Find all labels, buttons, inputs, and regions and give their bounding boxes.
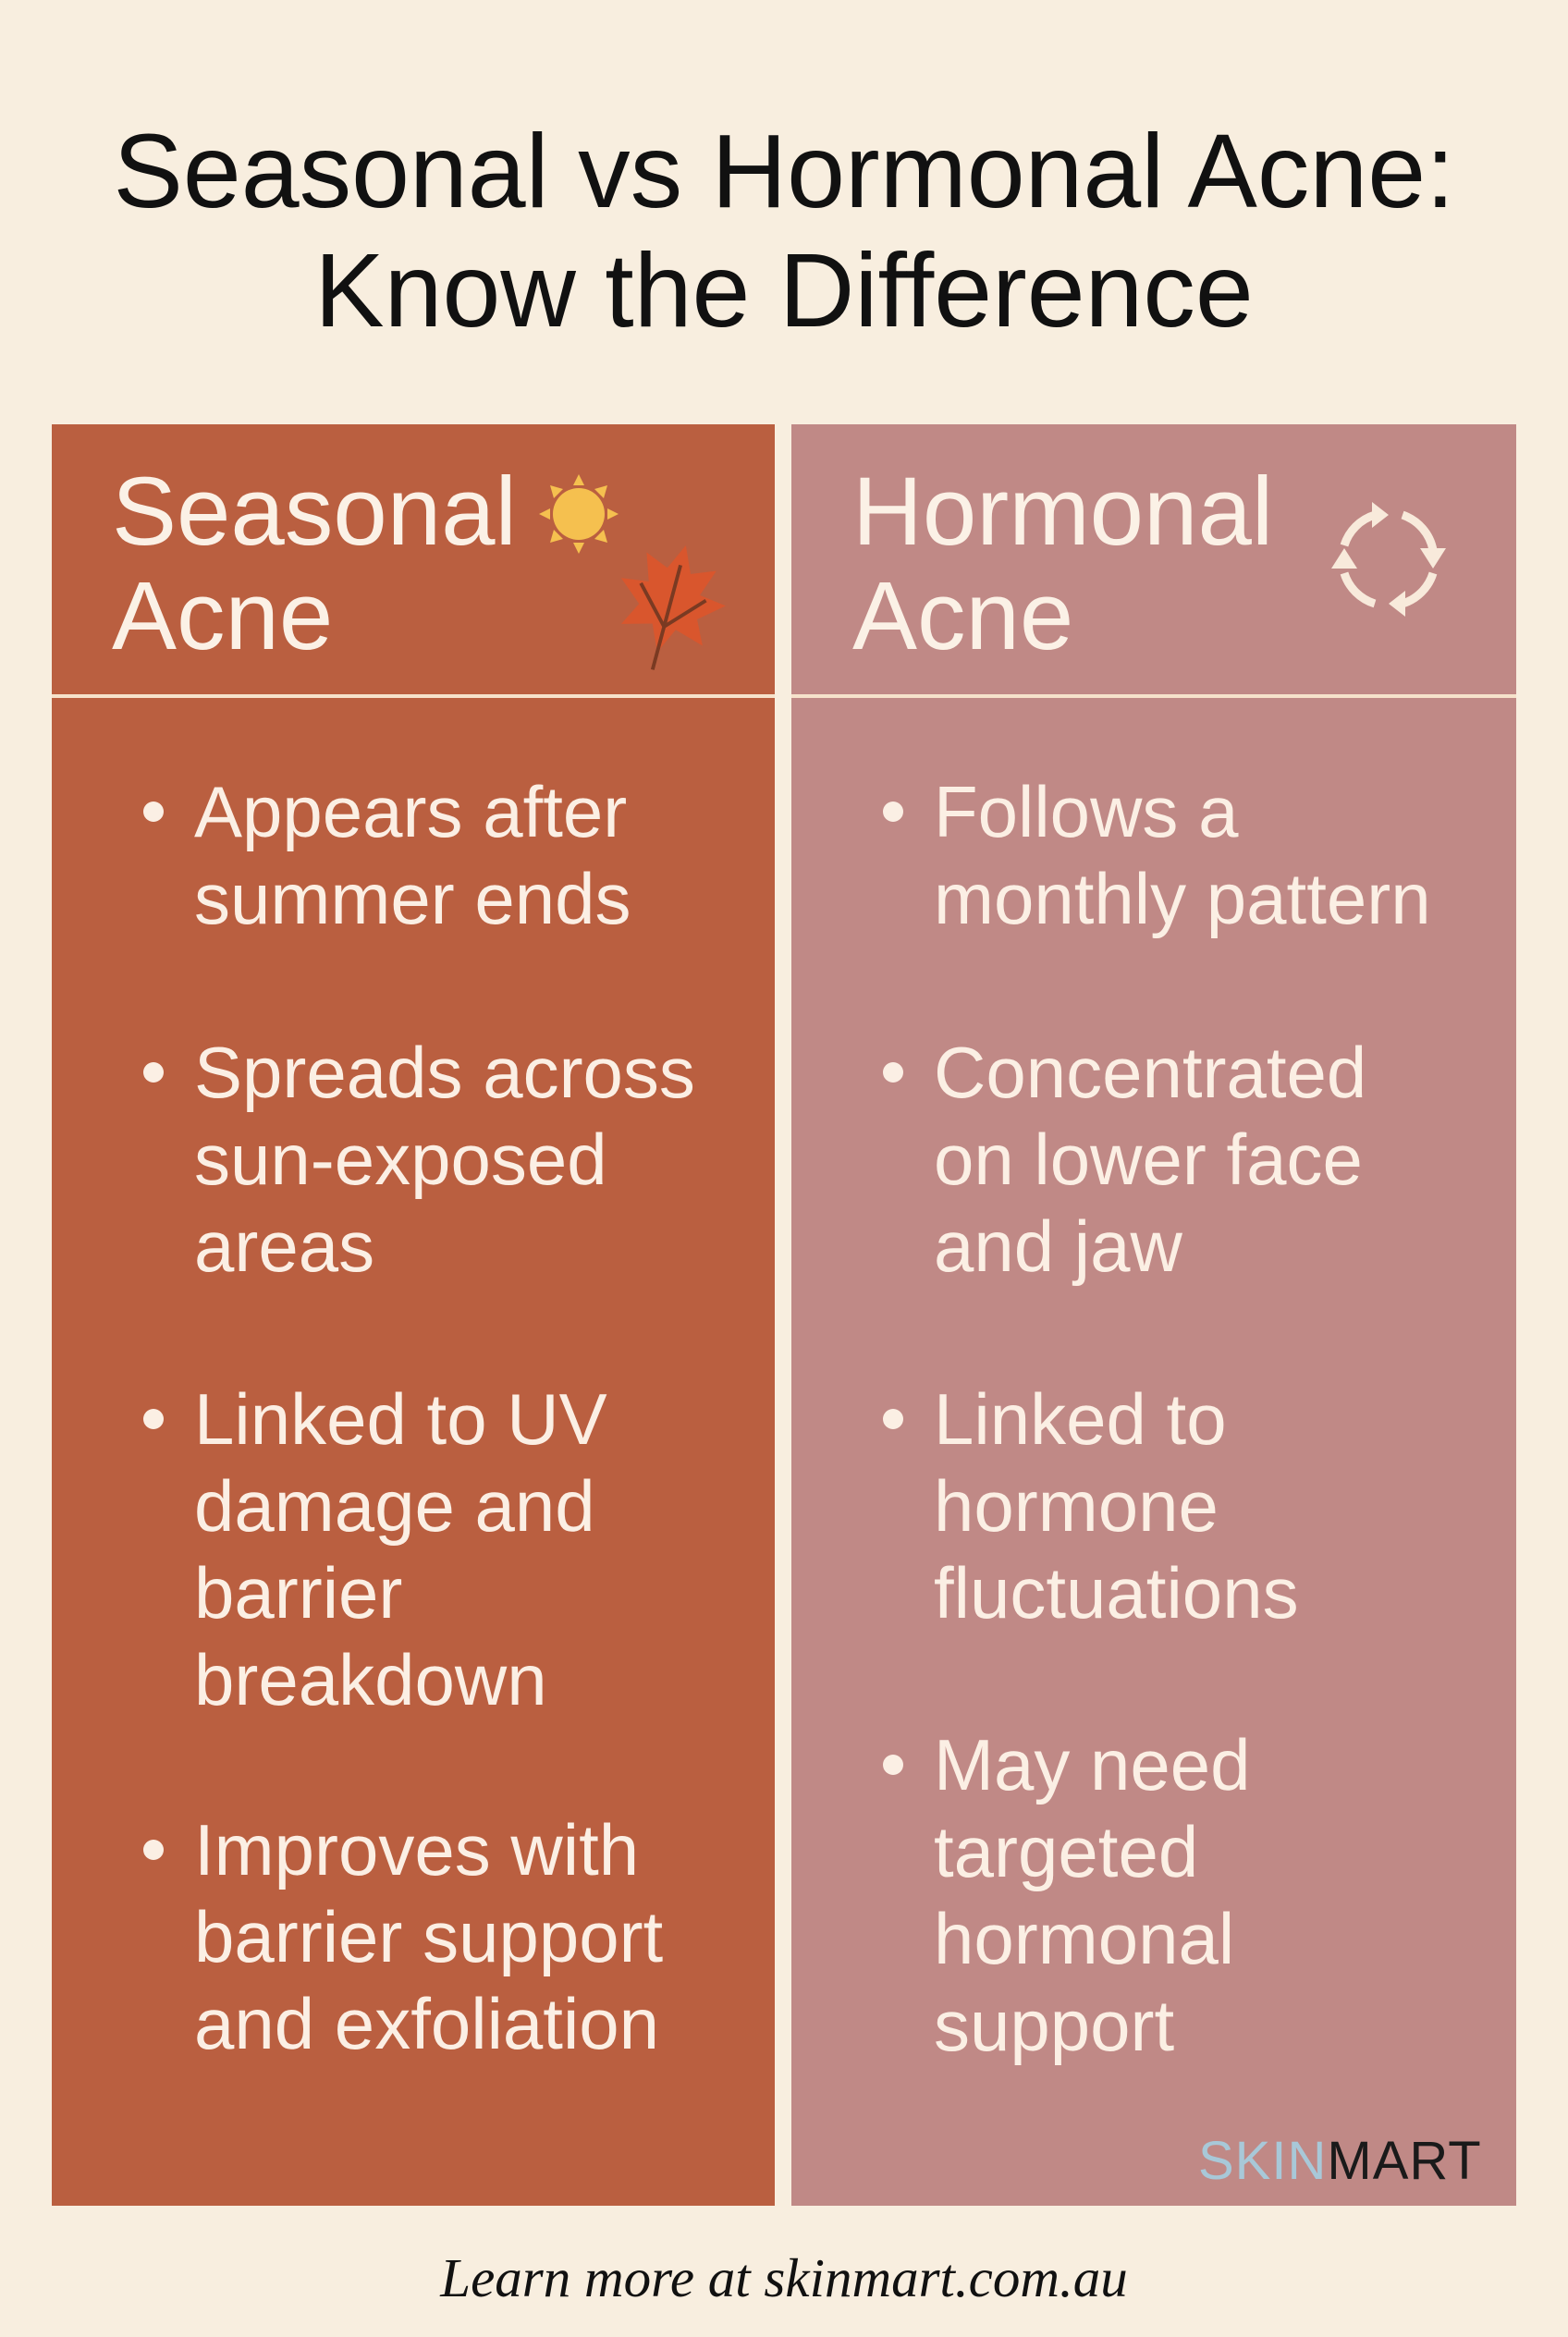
item: barrier <box>194 1552 402 1633</box>
heading: seasonal acne <box>112 458 517 670</box>
item: sun-exposed <box>194 1119 607 1200</box>
item: summer ends <box>194 858 631 939</box>
item: fluctuations <box>934 1552 1299 1633</box>
item: areas <box>194 1205 374 1287</box>
logo: SKINMART <box>1198 2131 1482 2191</box>
footer: Learn more at skinmart.com.au <box>440 2247 1128 2308</box>
item: hormonal <box>934 1898 1234 1979</box>
heading: seasonal acne: Seasonal <box>112 458 517 566</box>
title: Know the Difference <box>314 232 1254 349</box>
item: Concentrated <box>934 1032 1366 1113</box>
icon: cycle arrows <box>1331 502 1446 617</box>
icon: sun and leaf <box>539 474 725 670</box>
item: barrier support <box>194 1896 663 1977</box>
item: damage and <box>194 1465 595 1547</box>
item <box>194 1029 695 1290</box>
item <box>194 1806 663 2067</box>
item: support <box>934 1985 1174 2066</box>
heading: hormonal acne: Acne <box>852 562 1073 670</box>
item: Linked to UV <box>194 1378 607 1460</box>
panel: seasonal acne <box>52 424 775 2206</box>
title <box>114 113 1454 349</box>
item: targeted <box>934 1811 1198 1892</box>
item <box>934 1721 1251 2069</box>
item <box>934 768 1431 942</box>
item <box>194 768 631 942</box>
heading: hormonal acne: Hormonal <box>852 458 1273 566</box>
item: and jaw <box>934 1205 1182 1287</box>
heading: seasonal acne: Acne <box>112 562 333 670</box>
item: monthly pattern <box>934 858 1431 939</box>
heading: hormonal acne <box>852 458 1273 670</box>
item: hormone <box>934 1465 1219 1547</box>
item: Spreads across <box>194 1032 695 1113</box>
item: breakdown <box>194 1639 547 1720</box>
item: Appears after <box>194 771 627 852</box>
title: Seasonal vs Hormonal Acne: <box>114 113 1454 229</box>
item: May need <box>934 1724 1251 1805</box>
item <box>194 1376 607 1723</box>
item: Follows a <box>934 771 1238 852</box>
panel: hormonal acne <box>791 424 1516 2206</box>
item <box>934 1376 1299 1636</box>
item: Linked to <box>934 1378 1227 1460</box>
item: Improves with <box>194 1809 639 1890</box>
item: and exfoliation <box>194 1983 659 2064</box>
item <box>934 1029 1366 1290</box>
item: on lower face <box>934 1119 1363 1200</box>
